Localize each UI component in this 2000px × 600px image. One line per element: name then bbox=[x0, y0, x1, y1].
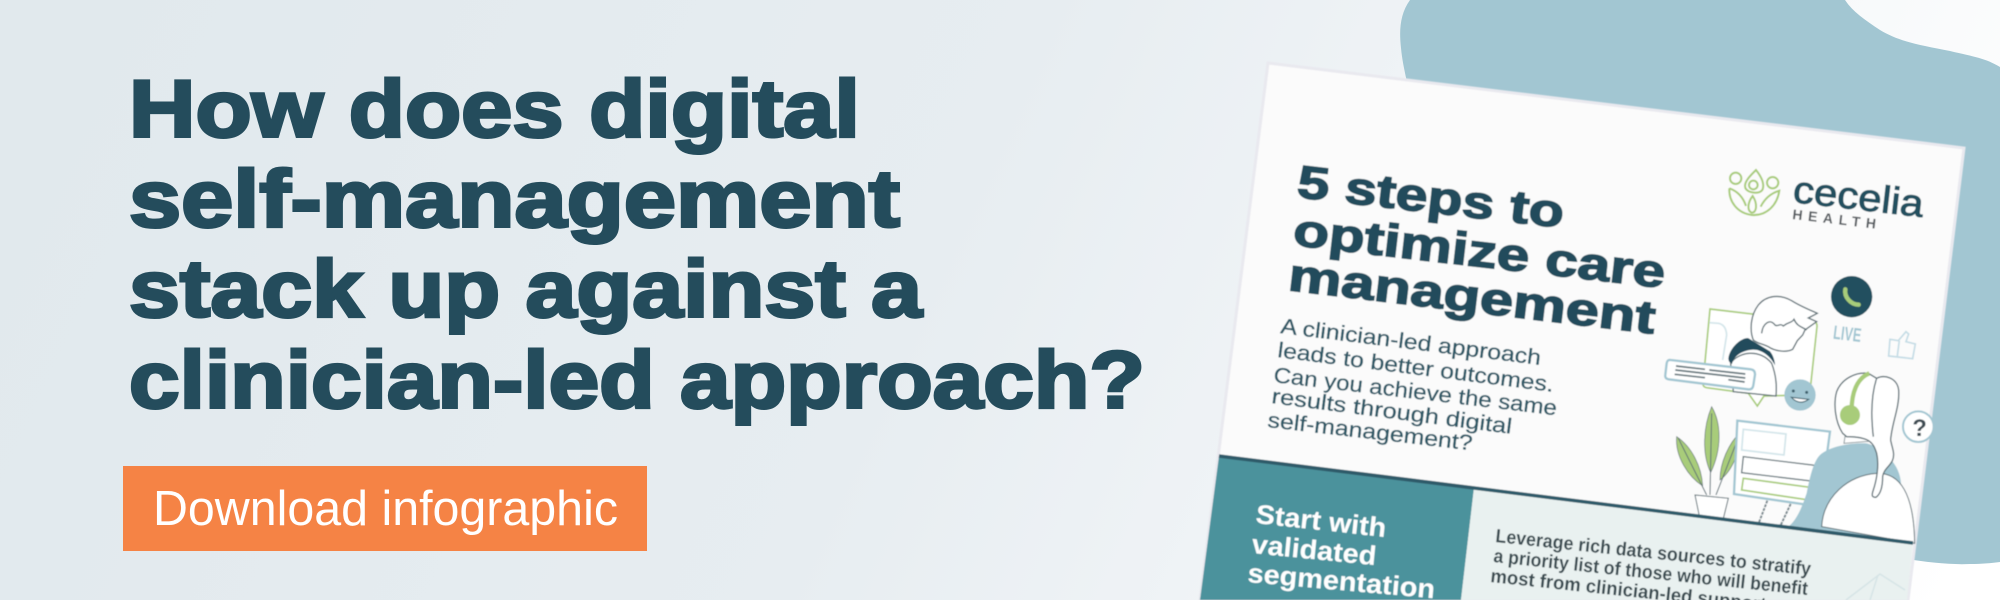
monitor bbox=[1734, 421, 1830, 525]
heading: How does digital bbox=[129, 64, 860, 154]
card title: management bbox=[1286, 248, 1658, 344]
card intro paragraph: self-management? bbox=[1266, 408, 1474, 455]
heading: stack up against a bbox=[129, 244, 923, 334]
decorative blue blob bbox=[1400, 0, 2000, 564]
step panel: teal label: validated bbox=[1250, 529, 1378, 571]
card intro paragraph: leads to better outcomes. bbox=[1276, 338, 1555, 397]
card sheet bbox=[1200, 63, 1964, 600]
inner window line bbox=[1709, 323, 1727, 360]
card intro paragraph: A clinician-led approach bbox=[1279, 314, 1542, 370]
icon: lotus bbox=[1729, 170, 1779, 215]
button: download infographic: Download infographic bbox=[153, 482, 618, 536]
logo: Cecelia Health: HEALTH bbox=[1792, 206, 1877, 232]
headset bbox=[1852, 373, 1869, 410]
card title bbox=[1286, 155, 1668, 344]
video caller bbox=[1728, 296, 1817, 396]
chair back bbox=[1822, 473, 1915, 543]
heading bbox=[129, 64, 1145, 426]
card intro paragraph: Can you achieve the same bbox=[1272, 363, 1558, 420]
speech bubble bbox=[1665, 360, 1755, 389]
card title: optimize care bbox=[1291, 203, 1668, 298]
neck bbox=[1844, 430, 1870, 443]
button: download infographic bbox=[123, 466, 647, 551]
section divider line bbox=[1219, 456, 1913, 543]
card title: 5 steps to bbox=[1295, 155, 1567, 238]
question bubble: ? bbox=[1912, 415, 1927, 442]
live label: LIVE bbox=[1832, 323, 1862, 347]
care manager bbox=[1787, 373, 1915, 543]
illustration: video chat and care manager bbox=[1665, 276, 1934, 543]
icon: thumbs up bbox=[1889, 332, 1915, 359]
video frame with speech tail bbox=[1703, 309, 1817, 406]
logo: Cecelia Health: cecelia bbox=[1791, 169, 1927, 226]
icon: phone badge bbox=[1831, 276, 1872, 317]
infographic preview card bbox=[1200, 63, 1964, 600]
step panel: description: Leverage rich data sources to stratify bbox=[1494, 526, 1812, 580]
plant bbox=[1677, 407, 1741, 519]
hair bbox=[1835, 373, 1899, 497]
step panel: teal label: Start with bbox=[1254, 499, 1388, 543]
card intro paragraph bbox=[1266, 314, 1558, 455]
heading: self-management bbox=[129, 154, 900, 244]
question bubble bbox=[1903, 411, 1934, 442]
shawl bbox=[1787, 443, 1907, 543]
card intro paragraph: results through digital bbox=[1270, 384, 1513, 439]
logo: Cecelia Health bbox=[1729, 169, 1927, 232]
step panel: teal label bbox=[1200, 456, 1474, 600]
step panel: description bbox=[1461, 488, 1913, 600]
heading: clinician-led approach? bbox=[129, 336, 1145, 426]
icon: smiley bbox=[1784, 379, 1816, 411]
